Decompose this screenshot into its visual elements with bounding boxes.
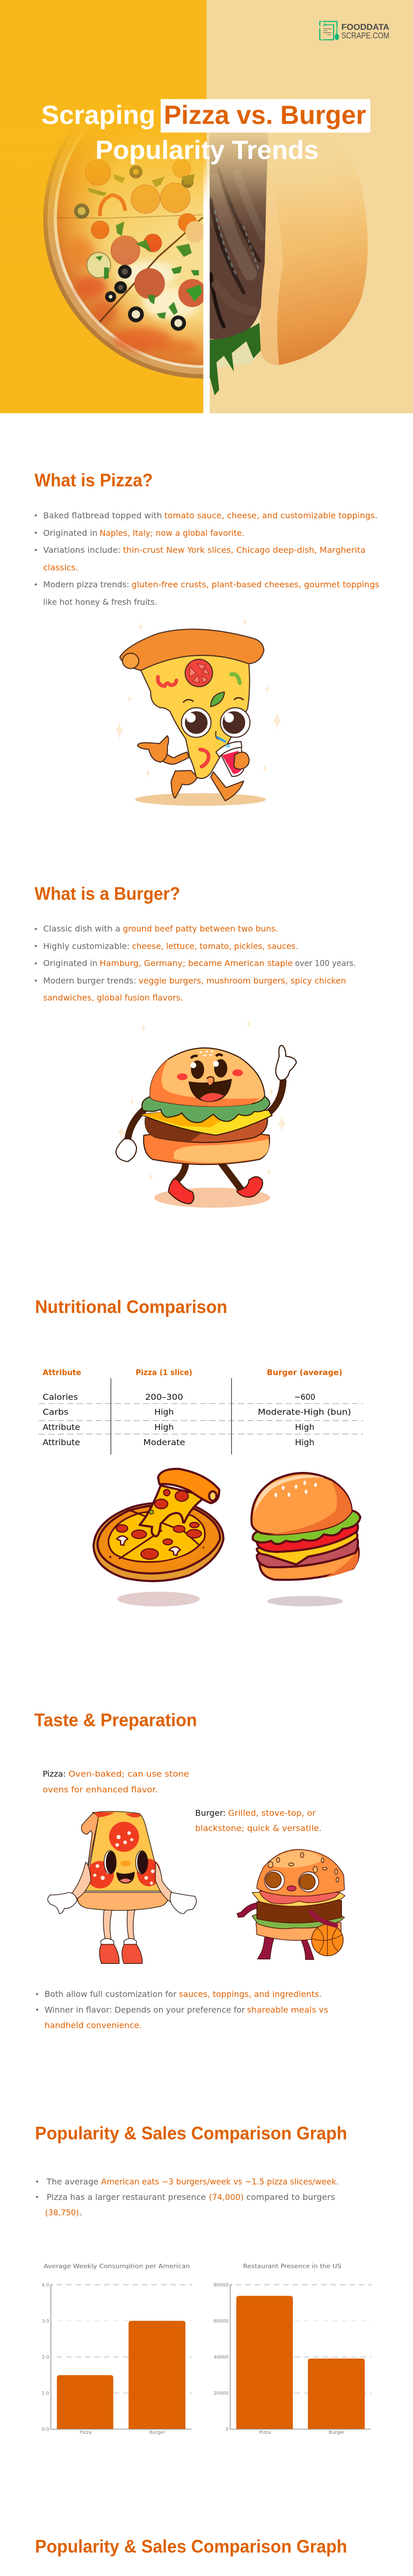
bullet list: burger facts: cheese, lettuce, tomato, pickles, sauces. (132, 941, 298, 951)
bullet list: taste summary: handheld convenience. (44, 2020, 142, 2030)
center white divider (203, 147, 210, 413)
logo: fooddata scrape: SCRAPE.COM (341, 31, 389, 41)
bar chart: weekly consumption: 0.0 (42, 2427, 49, 2432)
bar chart: weekly consumption: Pizza (80, 2430, 92, 2435)
bullet list: taste summary (36, 1989, 328, 2030)
bullet list: pizza facts: classics. (43, 563, 78, 572)
bar chart: weekly consumption: 1.0 (42, 2391, 49, 2396)
bullet list: pizza facts (35, 511, 380, 607)
bar chart: weekly consumption: Burger (149, 2430, 165, 2435)
comparison table: Pizza (1 slice) (135, 1368, 192, 1377)
logo: fooddata scrape: FOODDATA (341, 22, 389, 32)
icon: whole pizza (94, 1469, 223, 1606)
bullet list: burger facts: Modern burger trends: (43, 976, 136, 986)
bullet list: pizza facts: thin-crust New York slices, Chicago deep-dish, Margherita (123, 545, 366, 555)
comparison table: Burger (average) (267, 1368, 342, 1377)
bullet list: consumption facts: (74,000) (209, 2192, 244, 2202)
bar chart: weekly consumption: 3.0 (42, 2318, 49, 2324)
comparison table: High (154, 1422, 174, 1432)
illustration: pizza mascot (115, 617, 282, 806)
bullet list: pizza facts: Naples, Italy; now a global favorite. (99, 528, 245, 538)
hero burger photo (210, 132, 368, 396)
bullet list: pizza facts: . (375, 511, 377, 520)
main title: Popularity Trends (95, 135, 319, 164)
bar chart: restaurant presence: Burger (329, 2430, 345, 2435)
heading: popularity and sales comparison graph: Popularity & Sales Comparison Graph (35, 2124, 347, 2143)
illustration: pizza character (48, 1811, 196, 1963)
illustration: burger character with basketball (237, 1850, 345, 1960)
bullet list: pizza facts: like hot honey & fresh fruits. (43, 597, 157, 607)
comparison table: Calories (43, 1392, 78, 1402)
text block: pizza preparation (43, 1769, 189, 1794)
panel: taste and preparation (34, 1710, 346, 2030)
bullet list: consumption facts: (38,750) (45, 2208, 79, 2217)
bullet list: pizza facts: Baked flatbread topped with (43, 511, 162, 520)
bullet list: burger facts: Classic dish with a (43, 924, 121, 934)
panel: popularity and sales graphs (35, 2124, 372, 2435)
comparison table: Attribute (43, 1437, 80, 1447)
text block: pizza preparation: Oven-baked; can use stone (68, 1769, 189, 1779)
bar chart: restaurant presence (214, 2263, 372, 2435)
comparison table: Attribute (43, 1422, 80, 1432)
comparison table: High (154, 1407, 174, 1417)
bullet list: consumption facts: Pizza has a larger restaurant presence (47, 2192, 206, 2202)
heading: nutritional comparison: Nutritional Comparison (35, 1297, 227, 1317)
hero banner (0, 0, 413, 413)
bar chart: restaurant presence: Restaurant Presence in the US (243, 2263, 341, 2270)
bullet list: burger facts: Originated in (43, 958, 97, 968)
bullet list: burger facts: ground beef patty between two buns. (123, 924, 278, 934)
comparison table: Carbs (43, 1407, 68, 1417)
heading: what is pizza: What is Pizza? (35, 471, 153, 490)
bullet list: taste summary: shareable meals vs (247, 2005, 328, 2014)
bullet list: burger facts: veggie burgers, mushroom burgers, spicy chicken (139, 976, 346, 986)
bullet list: taste summary: sauces, toppings, and ingredients. (179, 1989, 322, 1999)
main title: Scraping (41, 100, 156, 129)
text block: pizza preparation: Pizza: (43, 1769, 66, 1779)
comparison table: Moderate (143, 1437, 185, 1447)
bar chart: restaurant presence: Pizza (259, 2430, 271, 2435)
bar chart: restaurant presence: 60000 (214, 2318, 229, 2324)
bar chart: restaurant presence: 40000 (214, 2354, 229, 2360)
bullet list: consumption facts: . (79, 2208, 82, 2217)
logo: fooddata scrape (319, 21, 389, 41)
bullet list: pizza facts: Variations include: (43, 545, 121, 555)
bullet list: consumption facts: compared to burgers (246, 2192, 335, 2202)
heading: taste and preparation: Taste & Preparation (35, 1710, 197, 1730)
bar chart: weekly consumption: 2.0 (42, 2354, 49, 2360)
icon: burger (251, 1473, 360, 1606)
bullet list: burger facts: Highly customizable: (43, 941, 130, 951)
comparison table: Attribute (43, 1368, 81, 1377)
bar chart: weekly consumption: 4.0 (42, 2282, 49, 2288)
bar chart: restaurant presence: 0 (226, 2427, 229, 2432)
panel: what is a burger (35, 884, 356, 1208)
bullet list: burger facts: over 100 years. (295, 958, 356, 968)
bullet list: pizza facts: tomato sauce, cheese, and customizable toppings (164, 511, 375, 520)
comparison table: 200–300 (145, 1392, 183, 1402)
text block: burger preparation: Grilled, stove-top, or (228, 1808, 316, 1818)
heading: what is a burger: What is a Burger? (35, 884, 180, 904)
bar chart: restaurant presence: 80000 (214, 2282, 229, 2288)
main title: Pizza vs. Burger (164, 100, 366, 129)
comparison table: Moderate-High (bun) (258, 1407, 351, 1417)
bar chart: weekly consumption: Average Weekly Consumption per American (44, 2263, 190, 2270)
panel: what is pizza (35, 471, 380, 806)
comparison table: ~600 (294, 1392, 315, 1402)
bullet list: taste summary: Winner in flavor: Depends on your preference for (44, 2005, 245, 2014)
hero pizza photo (43, 130, 203, 378)
bullet list: consumption facts: The average (46, 2177, 98, 2187)
main title (41, 99, 370, 164)
text block: burger preparation (195, 1808, 322, 1833)
illustration: burger mascot (116, 1019, 296, 1208)
bar chart: weekly consumption (42, 2263, 192, 2435)
text block: pizza preparation: ovens for enhanced flavor. (43, 1785, 158, 1794)
bullet list: taste summary: Both allow full customization for (44, 1989, 177, 1999)
heading: popularity and sales comparison graph (trends): Popularity & Sales Comparison Graph (35, 2537, 347, 2556)
bullet list: pizza facts: gluten-free crusts, plant-based cheeses, gourmet toppings (131, 580, 380, 589)
comparison table: High (295, 1437, 315, 1447)
comparison table: High (295, 1422, 315, 1432)
bullet list: burger facts (35, 924, 356, 1003)
bullet list: pizza facts: Modern pizza trends: (43, 580, 129, 589)
text block: burger preparation: blackstone; quick & versatile. (195, 1823, 322, 1833)
bullet list: burger facts: sandwiches, global fusion flavors. (43, 993, 183, 1003)
bar chart: restaurant presence: 20000 (214, 2391, 229, 2396)
text block: burger preparation: Burger: (195, 1808, 226, 1818)
bullet list: consumption facts (36, 2177, 339, 2217)
bullet list: pizza facts: Originated in (43, 528, 97, 538)
comparison table (39, 1368, 363, 1454)
bullet list: burger facts: Hamburg, Germany; became American staple (99, 958, 293, 968)
bullet list: consumption facts: American eats ~3 burgers/week vs ~1.5 pizza slices/week. (101, 2177, 339, 2187)
panel: nutritional comparison (35, 1297, 363, 1606)
